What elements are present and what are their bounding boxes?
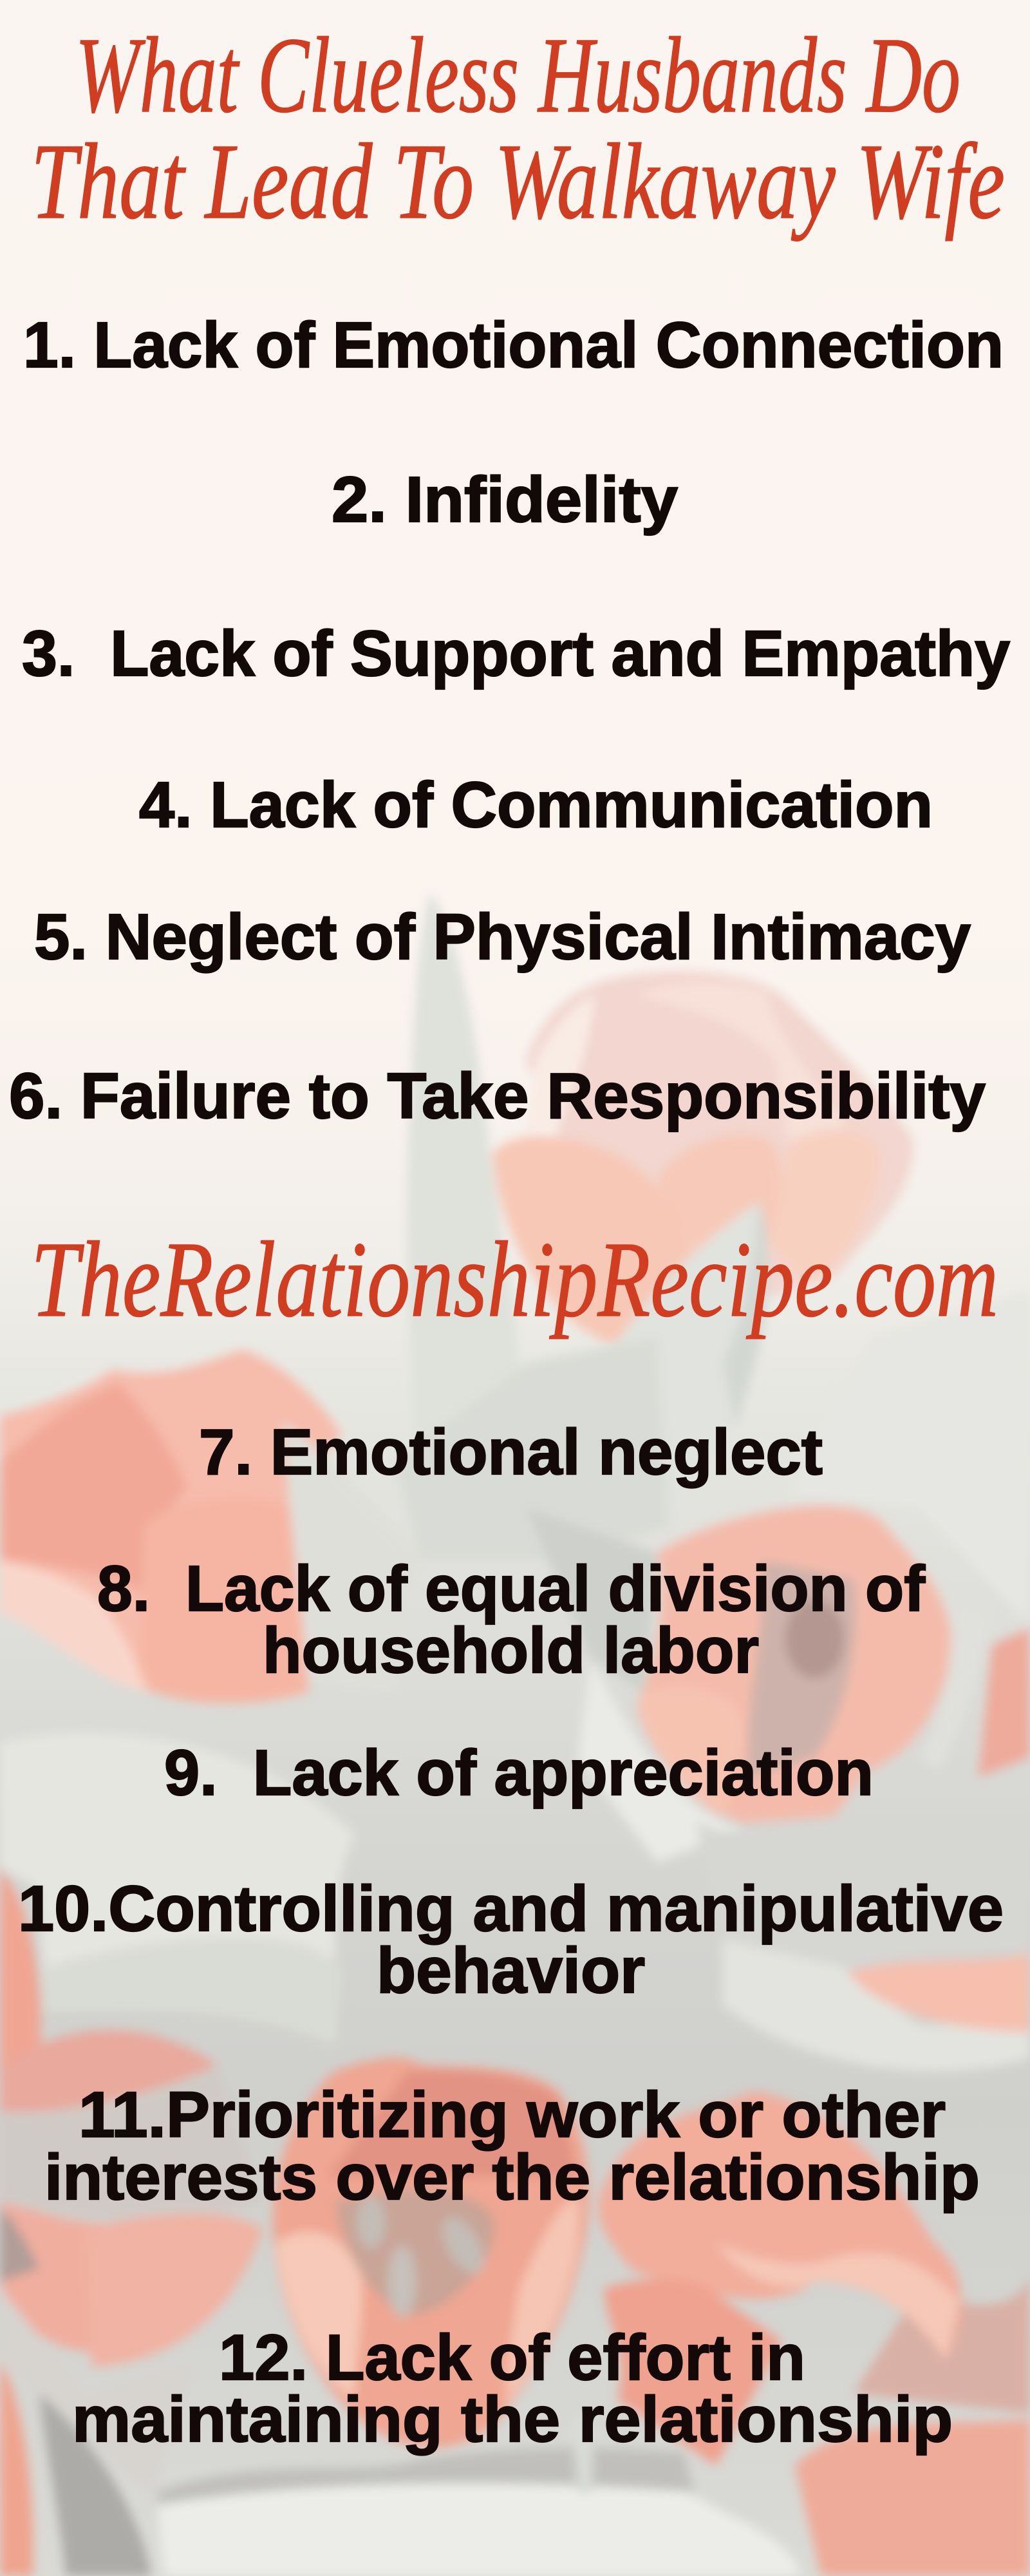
item 11: interests over the relationship xyxy=(44,2141,980,2213)
item 9: 9. Lack of appreciation xyxy=(164,1737,874,1809)
item 8: household labor xyxy=(263,1615,759,1687)
lower tulips and leaves xyxy=(0,1733,1030,2576)
item 8: 8. Lack of equal division of xyxy=(97,1553,926,1625)
item 8 xyxy=(97,1553,926,1687)
item 10: 10.Controlling and manipulative xyxy=(18,1873,1004,1945)
middle tulips xyxy=(0,1337,1030,1862)
item 4: 4. Lack of Communication xyxy=(139,769,933,841)
item 6: 6. Failure to Take Responsibility xyxy=(9,1060,986,1132)
upper tulip and leaves xyxy=(407,893,1030,1625)
item 7: 7. Emotional neglect xyxy=(199,1416,823,1488)
item 2: 2. Infidelity xyxy=(332,464,678,536)
item 1: 1. Lack of Emotional Connection xyxy=(23,309,1004,381)
item 10: behavior xyxy=(377,1935,645,2007)
item 11 xyxy=(44,2079,980,2213)
title xyxy=(31,15,1005,242)
large centre tulip xyxy=(272,2058,962,2492)
item 3: 3. Lack of Support and Empathy xyxy=(22,618,1010,690)
item 12: maintaining the relationship xyxy=(72,2383,953,2456)
item 12 xyxy=(72,2322,953,2456)
item 10 xyxy=(18,1873,1004,2007)
item 12: 12. Lack of effort in xyxy=(219,2322,805,2394)
item 5: 5. Neglect of Physical Intimacy xyxy=(34,901,971,973)
item 11: 11.Prioritizing work or other xyxy=(79,2079,946,2151)
